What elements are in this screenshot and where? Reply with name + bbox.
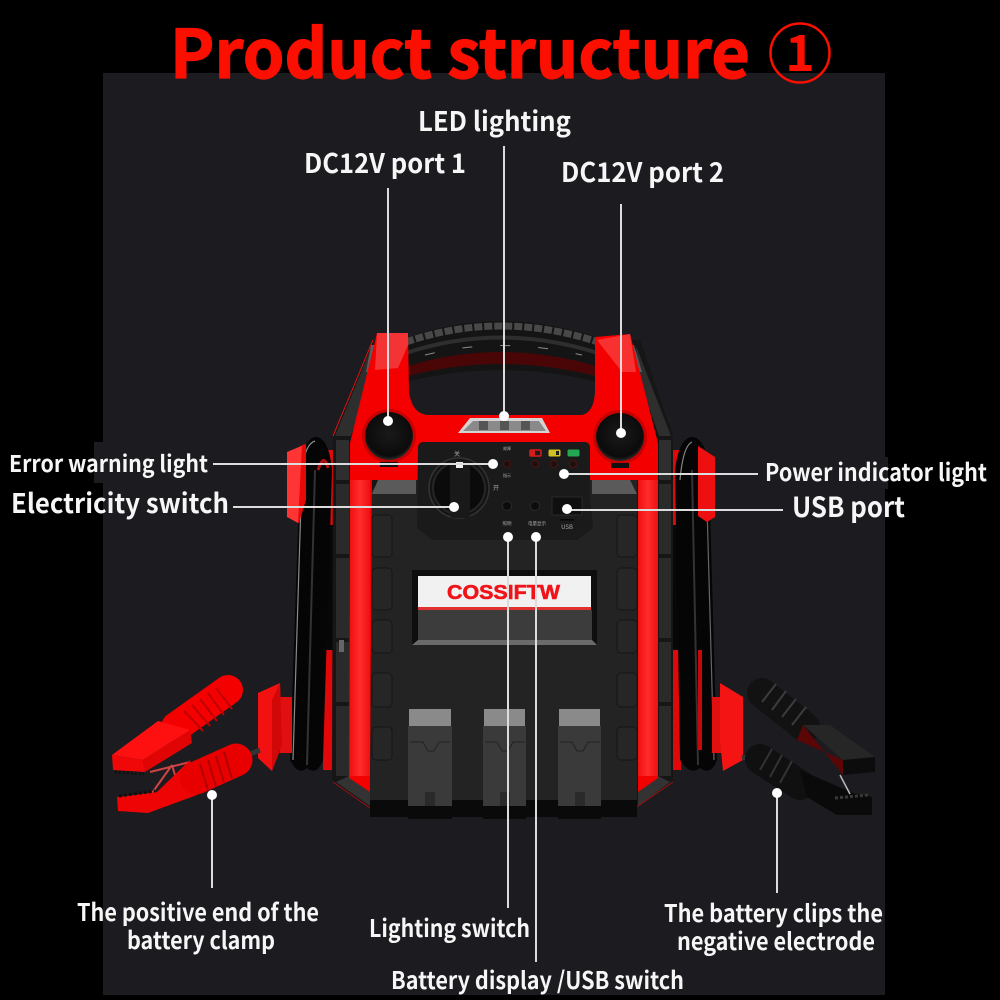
red frame bbox=[349, 333, 658, 792]
power knob: DC12V port 1 bbox=[362, 409, 416, 467]
selector dial bbox=[429, 449, 499, 518]
label: USB port bbox=[562, 486, 905, 526]
LED lamp bbox=[458, 418, 550, 433]
label: USB port: USB port bbox=[792, 486, 905, 526]
label: battery clips the negative electrode: negative electrode bbox=[677, 922, 875, 957]
jump starter device bbox=[258, 321, 743, 819]
selector dial: 开 bbox=[493, 483, 499, 492]
label: battery clips the negative electrode: The battery clips the bbox=[664, 894, 883, 929]
cable coil: left bbox=[280, 437, 334, 771]
panel buttons bbox=[502, 502, 540, 510]
shell side trim bbox=[333, 340, 673, 808]
negative battery clamp (black) bbox=[742, 684, 875, 815]
USB socket bbox=[552, 497, 582, 531]
label: DC12V port 2: DC12V port 2 bbox=[561, 151, 724, 190]
label: Lighting switch bbox=[369, 532, 530, 944]
label: battery clips the negative electrode bbox=[664, 788, 883, 957]
label: Error warning light: Error warning light bbox=[9, 445, 208, 479]
label: DC12V port 1 bbox=[304, 142, 466, 426]
label: Electricity switch: Electricity switch bbox=[11, 482, 229, 521]
tiny panel labels: 故障 bbox=[503, 445, 511, 452]
label: DC12V port 2 bbox=[561, 151, 724, 438]
selector dial: 关 bbox=[454, 449, 460, 458]
title: 1 bbox=[785, 14, 815, 86]
label: Error warning light bbox=[9, 445, 498, 479]
bottom feet bbox=[408, 709, 601, 819]
label: LED lighting: LED lighting bbox=[418, 100, 571, 139]
control panel bbox=[417, 442, 593, 540]
title: Product structure bbox=[170, 1, 750, 98]
side brackets bbox=[258, 444, 743, 771]
tiny panel labels: 指示 bbox=[503, 472, 511, 479]
logo plate bbox=[412, 570, 597, 645]
logo plate: COSSIFTW bbox=[447, 582, 560, 604]
main black body bbox=[370, 480, 637, 817]
label: positive end of the battery clamp bbox=[77, 790, 319, 956]
carrying handle bbox=[406, 321, 598, 382]
battery level icons bbox=[530, 450, 579, 456]
power knob: DC12V port 2 bbox=[593, 410, 647, 468]
tiny panel labels: 电量显示 bbox=[528, 520, 546, 527]
label: Electricity switch bbox=[11, 482, 459, 521]
label: LED lighting bbox=[418, 100, 571, 421]
cable coil: right bbox=[672, 437, 722, 771]
label: Power indicator light bbox=[559, 453, 987, 488]
tiny panel labels bbox=[502, 445, 546, 527]
USB socket: USB bbox=[561, 522, 573, 531]
label: positive end of the battery clamp: battery clamp bbox=[127, 921, 275, 956]
outer dark shell bbox=[332, 340, 673, 817]
label: positive end of the battery clamp: The positive end of the bbox=[77, 893, 319, 928]
label: Battery display / USB switch bbox=[391, 532, 684, 996]
label: DC12V port 1: DC12V port 1 bbox=[304, 142, 466, 181]
label: Battery display / USB switch: Battery display /USB switch bbox=[391, 961, 684, 996]
label: Lighting switch: Lighting switch bbox=[369, 909, 530, 944]
indicator lights bbox=[504, 460, 576, 468]
positive battery clamp (red) bbox=[112, 688, 260, 813]
tiny panel labels: 照明 bbox=[502, 521, 512, 527]
